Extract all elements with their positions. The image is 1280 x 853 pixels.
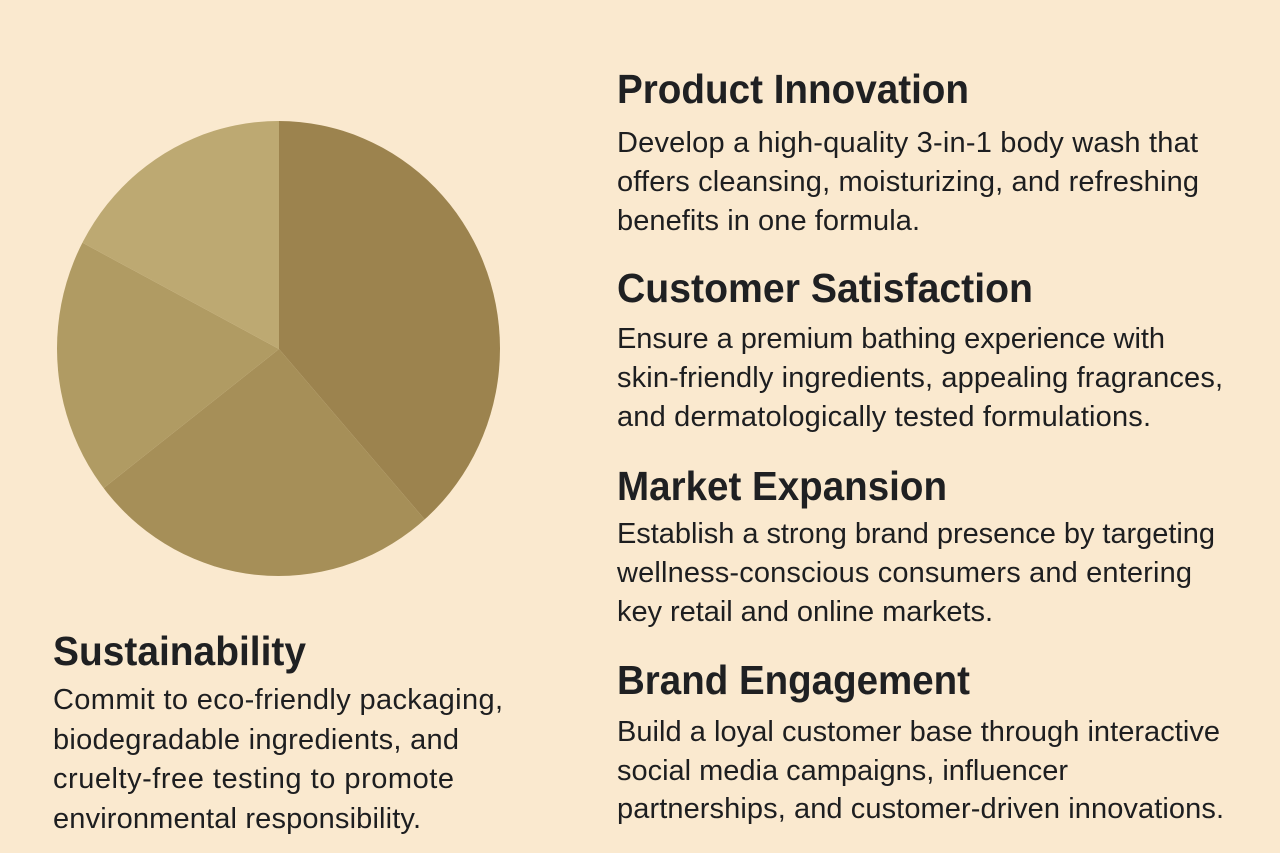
pie slice: left xyxy=(57,242,279,488)
panel: sustainability xyxy=(53,628,503,835)
text block: product innovation: offers cleansing, moisturizing, and refreshing xyxy=(617,166,1199,198)
text block: brand engagement: Build a loyal customer base through interactive xyxy=(617,716,1220,748)
panel: product innovation xyxy=(617,66,1199,237)
text block: sustainability: environmental responsibility. xyxy=(53,803,421,835)
text block: brand engagement: partnerships, and customer-driven innovations. xyxy=(617,793,1224,825)
text block: product innovation: Develop a high-quality 3-in-1 body wash that xyxy=(617,127,1198,159)
panel: brand engagement xyxy=(617,657,1224,825)
text block: market expansion xyxy=(616,518,1215,628)
text block: brand engagement: social media campaigns, influencer xyxy=(617,755,1068,787)
text block: customer satisfaction: and dermatologically tested formulations. xyxy=(617,401,1151,433)
text block: sustainability xyxy=(53,684,503,835)
heading: product innovation: Product Innovation xyxy=(617,66,969,112)
panel: customer satisfaction xyxy=(617,265,1223,433)
text block: sustainability: biodegradable ingredients, and xyxy=(53,724,459,756)
text block: customer satisfaction: Ensure a premium bathing experience with xyxy=(617,323,1165,355)
text block: customer satisfaction xyxy=(617,323,1223,433)
text block: customer satisfaction: skin-friendly ingredients, appealing fragrances, xyxy=(617,362,1223,394)
pie slice: largest, dark xyxy=(279,121,500,520)
text block: market expansion: wellness-conscious consumers and entering xyxy=(616,557,1192,589)
text block: brand engagement xyxy=(617,716,1224,825)
heading: market expansion: Market Expansion xyxy=(617,463,947,509)
pie slice: top left, lightest xyxy=(82,121,279,349)
pie chart xyxy=(57,121,500,576)
heading: brand engagement: Brand Engagement xyxy=(617,657,970,703)
heading: sustainability: Sustainability xyxy=(53,628,306,674)
panel: market expansion xyxy=(616,463,1215,628)
text block: product innovation xyxy=(617,127,1199,237)
text block: market expansion: Establish a strong brand presence by targeting xyxy=(617,518,1215,550)
heading: customer satisfaction: Customer Satisfaction xyxy=(617,265,1033,311)
text block: product innovation: benefits in one formula. xyxy=(617,205,920,237)
text block: market expansion: key retail and online markets. xyxy=(617,596,993,628)
text block: sustainability: cruelty-free testing to promote xyxy=(53,763,454,795)
pie slice: bottom xyxy=(104,349,424,576)
text block: sustainability: Commit to eco-friendly packaging, xyxy=(53,684,503,716)
